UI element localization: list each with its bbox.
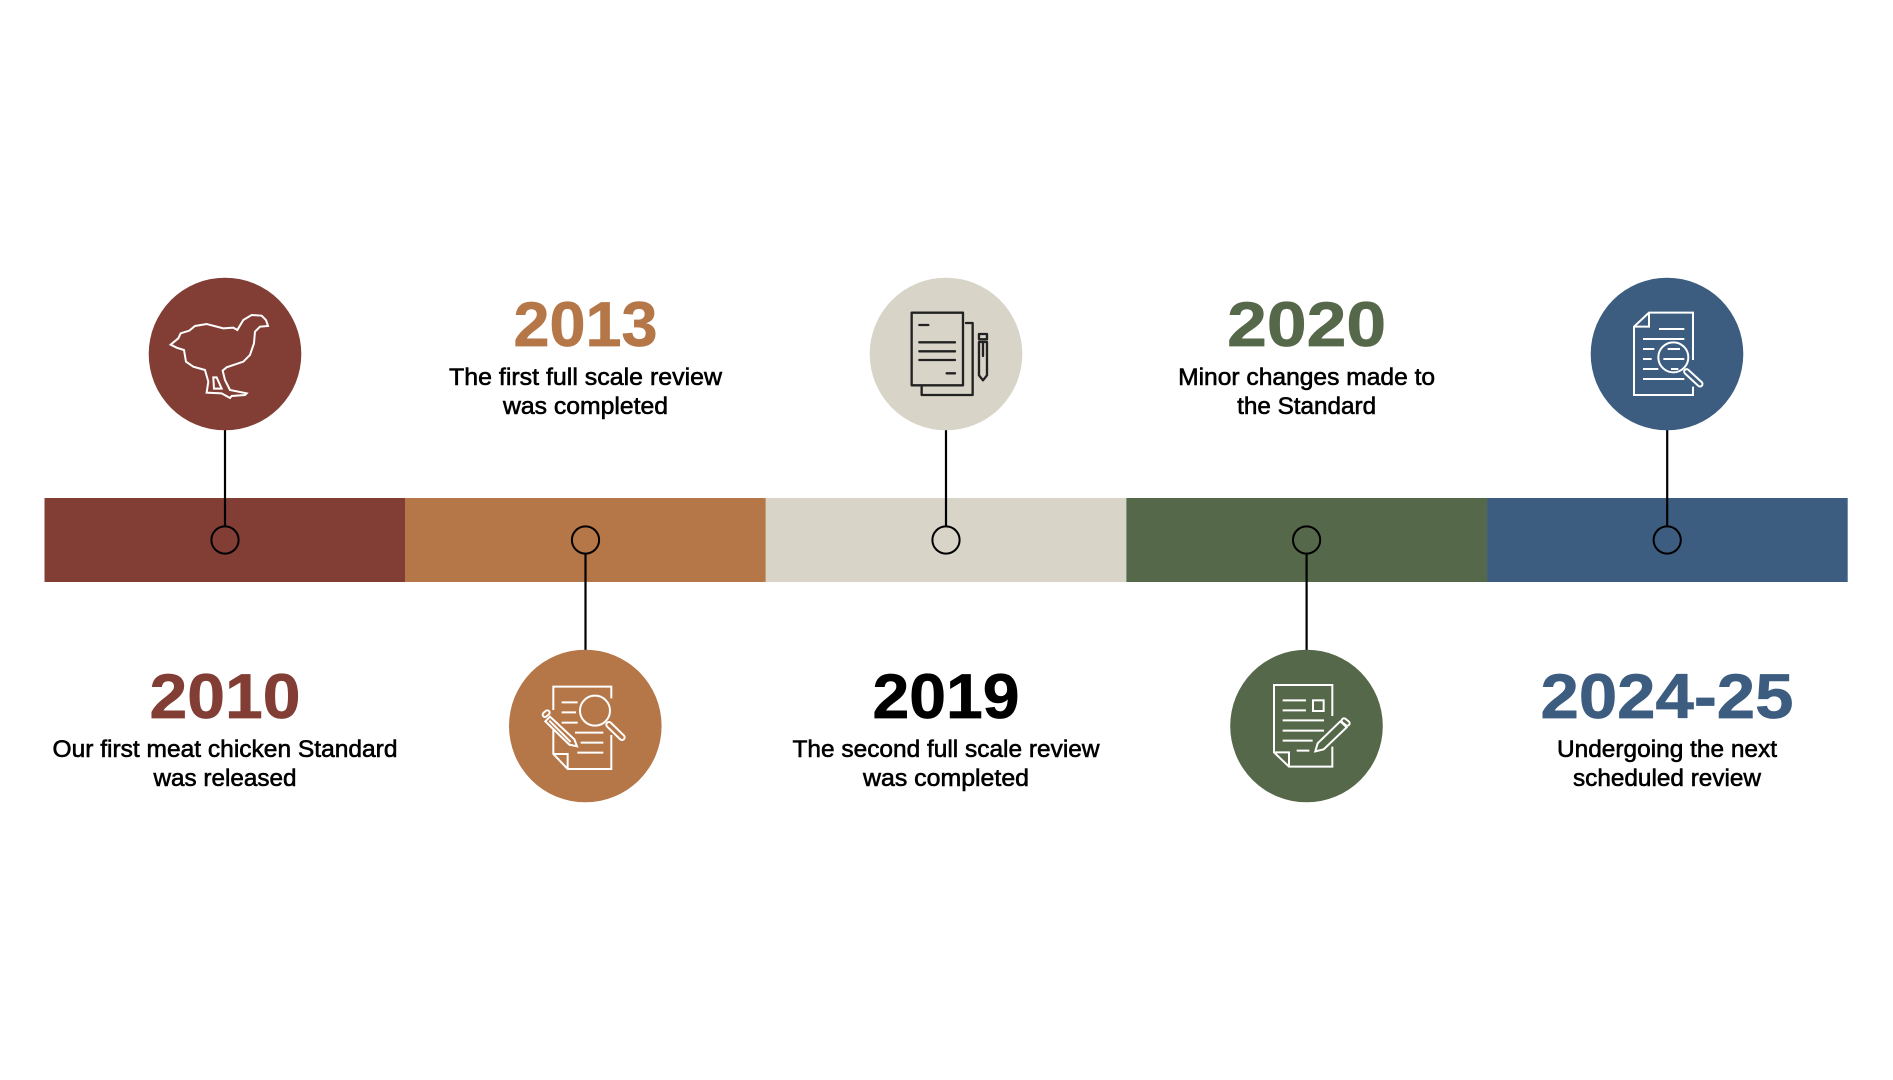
- icon: chicken: [149, 278, 301, 430]
- description 2024-25: Undergoing the next: [1557, 736, 1777, 763]
- year 2010: 2010: [150, 662, 300, 732]
- milestone: 2019: [792, 278, 1100, 792]
- description 2019: [792, 736, 1100, 792]
- description 2013: [449, 364, 723, 420]
- connector 2010: [224, 429, 226, 527]
- milestone: 2010: [52, 278, 398, 792]
- marker 2019: [932, 526, 960, 554]
- description 2013: The first full scale review: [449, 364, 723, 391]
- description 2013: was completed: [502, 393, 668, 420]
- marker 2013: [572, 526, 599, 554]
- year 2024-25: 2024-25: [1540, 662, 1794, 732]
- icon: document with magnifier: [1591, 278, 1743, 430]
- description 2010: Our first meat chicken Standard: [52, 736, 398, 763]
- timeline bar: [44, 498, 1848, 582]
- description 2024-25: scheduled review: [1573, 765, 1762, 792]
- connector 2020: [1305, 553, 1308, 651]
- connector 2013: [584, 553, 587, 651]
- description 2010: [52, 736, 398, 792]
- year 2013: 2013: [514, 290, 658, 360]
- description 2010: was released: [152, 765, 296, 792]
- description 2019: The second full scale review: [792, 736, 1100, 763]
- description 2020: the Standard: [1237, 393, 1376, 420]
- description 2019: was completed: [862, 765, 1029, 792]
- connector 2019: [945, 429, 947, 527]
- connector 2024-25: [1666, 429, 1668, 527]
- icon: document with magnifier and pencil: [509, 650, 662, 802]
- marker 2020: [1293, 526, 1320, 554]
- icon: documents and pencil: [870, 278, 1022, 430]
- milestone: 2013: [449, 290, 723, 802]
- icon: document with pencil: [1230, 650, 1383, 802]
- description 2024-25: [1557, 736, 1777, 792]
- year 2019: 2019: [872, 662, 1020, 732]
- marker 2010: [211, 526, 239, 554]
- milestone: 2024-25: [1540, 278, 1794, 792]
- year 2020: 2020: [1227, 290, 1386, 360]
- milestone: 2020: [1178, 290, 1435, 802]
- marker 2024-25: [1654, 526, 1681, 554]
- description 2020: Minor changes made to: [1178, 364, 1435, 391]
- description 2020: [1178, 364, 1435, 420]
